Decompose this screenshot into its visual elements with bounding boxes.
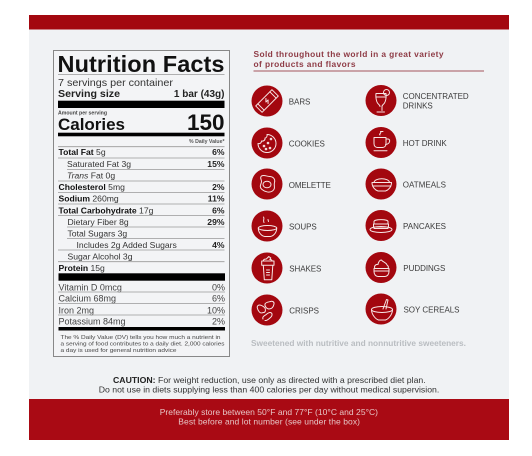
nutrient rows: Sodium 260mg xyxy=(58,194,119,204)
vitamins and minerals rows: Calcium 68mg xyxy=(58,294,116,304)
item: concentrated drinks xyxy=(366,85,469,116)
servings per container: 7 servings per container xyxy=(58,78,174,89)
heading: products xyxy=(254,49,444,69)
item: soups xyxy=(252,210,317,242)
nutrient rows xyxy=(58,147,225,273)
caution text xyxy=(99,375,439,394)
item: oatmeals: OATMEALS xyxy=(403,180,446,190)
nutrient rows: 6% xyxy=(212,205,225,215)
item: hot drink: HOT DRINK xyxy=(403,139,447,148)
item: cookies: COOKIES xyxy=(289,139,325,148)
vitamins and minerals rows: Vitamin D 0mcg xyxy=(58,282,122,292)
item: concentrated drinks: DRINKS xyxy=(403,102,433,110)
daily value header: % Daily Value* xyxy=(189,139,225,145)
nutrient rows: Total Sugars 3g xyxy=(68,228,127,238)
vitamins and minerals rows: 0% xyxy=(212,282,225,292)
nutrient rows: 15% xyxy=(207,159,225,169)
item: shakes xyxy=(252,252,321,284)
nutrient rows: Sugar Alcohol 3g xyxy=(68,252,133,262)
storage text xyxy=(160,407,378,426)
vitamins and minerals rows: 6% xyxy=(212,294,225,304)
item: crisps xyxy=(252,294,319,326)
nutrient rows: 6% xyxy=(212,147,225,157)
item: omelette xyxy=(252,168,331,200)
item: hot drink xyxy=(366,127,447,158)
calories row xyxy=(58,110,224,135)
caution text: CAUTION: For weight reduction, use only as directed with a prescribed diet plan. xyxy=(113,375,426,385)
item: bars xyxy=(252,86,310,116)
item: puddings: PUDDINGS xyxy=(403,264,445,273)
bottom red band xyxy=(29,399,509,440)
sweetener note: Sweetened with nutritive and nonnutritive sweeteners. xyxy=(251,338,466,348)
nutrient rows: Protein 15g xyxy=(58,263,105,273)
calories row: Amount per serving xyxy=(58,111,107,117)
vitamins and minerals rows xyxy=(58,282,225,327)
item: concentrated drinks: CONCENTRATED xyxy=(403,92,469,101)
heading: products: of products and flavors xyxy=(254,59,356,69)
serving size row: Serving size xyxy=(58,89,120,100)
footnote: The % Daily Value (DV) tells you how much a nutrient in xyxy=(60,335,220,341)
item: bars: BARS xyxy=(289,98,310,106)
nutrient rows: Dietary Fiber 8g xyxy=(68,217,129,227)
heading: Nutrition Facts: Nutrition Facts xyxy=(58,51,224,77)
nutrient rows: 2% xyxy=(212,182,225,192)
calories row: Calories xyxy=(58,115,125,134)
vitamins and minerals rows: 10% xyxy=(207,305,225,315)
nutrient rows: Cholesterol 5mg xyxy=(58,182,125,192)
item: cookies xyxy=(252,128,325,158)
nutrient rows: Trans Fat 0g xyxy=(67,171,115,181)
nutrient rows: Includes 2g Added Sugars xyxy=(76,240,177,250)
top red band xyxy=(29,15,509,30)
nutrient rows: Total Fat 5g xyxy=(58,147,106,157)
heading: products: Sold throughout the world in a great variety xyxy=(254,49,444,59)
item: shakes: SHAKES xyxy=(289,264,321,274)
calories row: 150 xyxy=(187,110,224,135)
storage text: Preferably store between 50°F and 77°F (10°C and 25°C) xyxy=(160,407,378,417)
item: pancakes: PANCAKES xyxy=(403,222,446,231)
nutrient rows: 4% xyxy=(212,240,225,250)
item: crisps: CRISPS xyxy=(289,306,319,316)
vitamins and minerals rows: Potassium 84mg xyxy=(58,317,126,327)
caution text: Do not use in diets supplying less than 400 calories per day without medical supervision. xyxy=(99,384,439,394)
nutrient rows: Saturated Fat 3g xyxy=(67,159,131,169)
serving size row xyxy=(58,89,224,100)
vitamins and minerals rows: Iron 2mg xyxy=(58,305,94,315)
footnote: a day is used for general nutrition advice xyxy=(60,348,176,354)
panel: nutrition facts label xyxy=(54,50,230,356)
item: omelette: OMELETTE xyxy=(289,181,331,190)
nutrient rows: 11% xyxy=(208,194,225,204)
item: oatmeals xyxy=(366,168,446,200)
footnote xyxy=(60,335,225,354)
vitamins and minerals rows: 2% xyxy=(212,317,225,327)
item: puddings xyxy=(366,252,445,283)
item: pancakes xyxy=(366,210,446,241)
nutrient rows: 29% xyxy=(207,217,225,227)
footnote: a serving of food contributes to a daily diet. 2,000 calories xyxy=(60,342,225,348)
item: soy cereals xyxy=(366,294,460,324)
item: soy cereals: SOY CEREALS xyxy=(404,306,460,314)
nutrient rows: Total Carbohydrate 17g xyxy=(58,205,154,215)
serving size row: 1 bar (43g) xyxy=(174,89,224,100)
storage text: Best before and lot number (see under the box) xyxy=(178,416,360,426)
item: soups: SOUPS xyxy=(289,222,317,232)
